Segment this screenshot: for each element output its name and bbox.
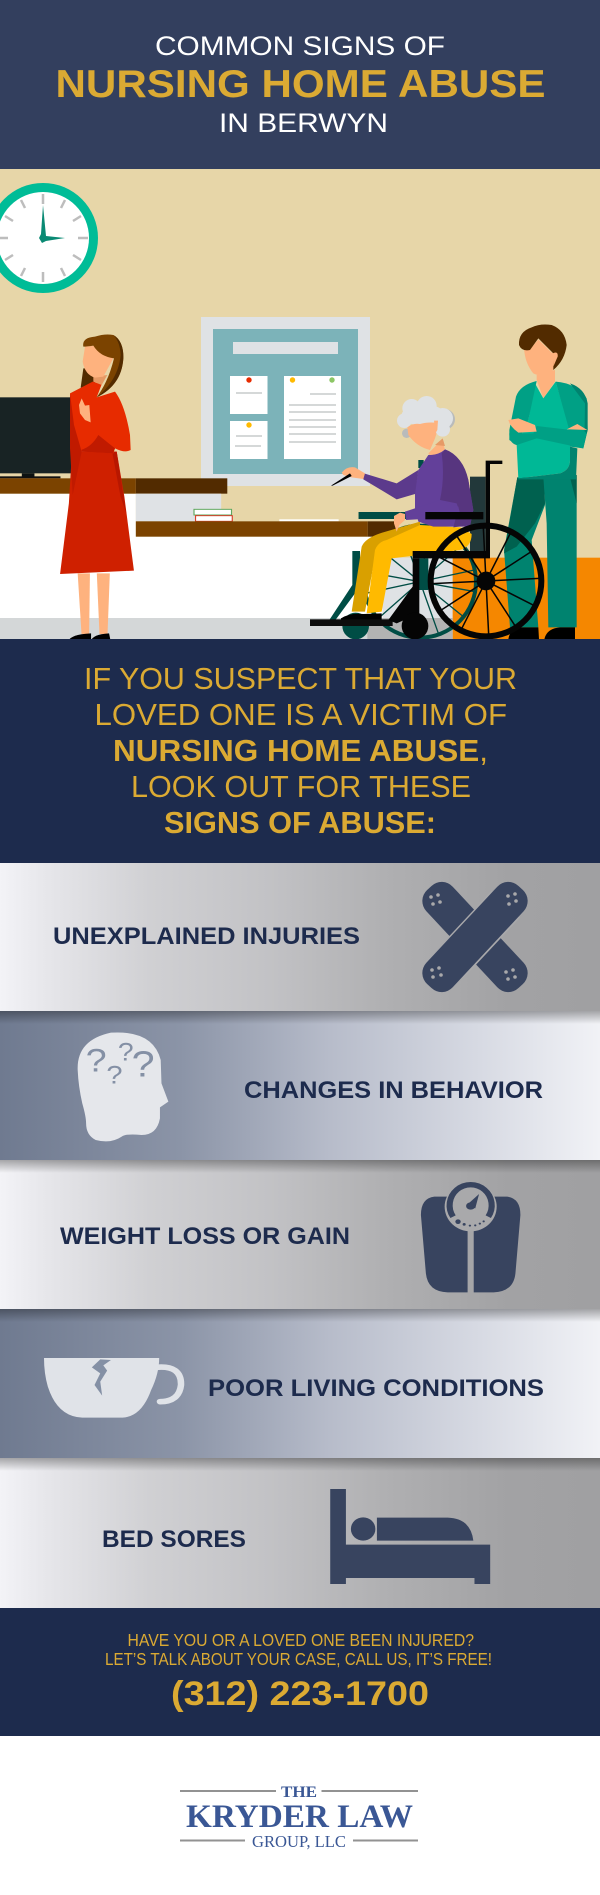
trousers [352,522,420,612]
shoes [341,613,382,620]
old woman in wheelchair [331,396,486,620]
intro line 1: IF YOU SUSPECT THAT YOUR [84,662,517,696]
wheelchair back wheel [329,526,476,639]
logo: The Kryder Law Group: GROUP, LLC [252,1832,346,1851]
wheelchair big wheel [431,526,541,636]
icon: head with question marks: ? [132,1045,155,1085]
head [428,440,445,455]
intro line 4: LOOK OUT FOR THESE [131,770,471,804]
legs and skirt [60,452,134,639]
icon: head with question marks: ? [106,1060,123,1089]
label: CHANGES IN BEHAVIOR [244,1077,543,1104]
icon: bathroom scale [421,1182,520,1292]
call to action panel [0,1608,600,1736]
nurse torso and head [508,325,588,479]
band: weight loss or gain [0,1160,600,1309]
logo: The Kryder Law Group: THE [281,1784,317,1801]
band: changes in behavior [0,1011,600,1160]
illustration: nursing home room [0,169,600,641]
logo: The Kryder Law Group [180,1784,418,1851]
label: UNEXPLAINED INJURIES [53,923,360,950]
band: bed sores [0,1458,600,1608]
icon: person in bed [330,1489,490,1584]
sweater [415,449,473,527]
label: WEIGHT LOSS OR GAIN [60,1223,350,1250]
icon: cracked cup [44,1358,181,1418]
icon: head with question marks: ? [118,1038,134,1066]
wheelchair frame and front wheel [310,461,502,639]
title line 3: IN BERWYN [219,108,388,138]
intro line 2: LOVED ONE IS A VICTIM OF [94,698,507,732]
woman in red dress [60,334,134,639]
nurse legs [504,475,577,639]
head and bodice [70,334,131,495]
icon: head with question marks [78,1032,168,1141]
nurse [504,325,588,639]
icon: wall clock [0,183,98,293]
label: POOR LIVING CONDITIONS [208,1375,544,1402]
logo: The Kryder Law Group: KRYDER LAW [186,1799,413,1835]
title line 2: NURSING HOME ABUSE [56,63,546,106]
band: unexplained injuries [0,863,600,1011]
intro line 3: NURSING HOME ABUSE , [113,734,488,768]
intro line 5: SIGNS OF ABUSE: [164,806,436,840]
bulletin board [201,317,370,486]
icon: crossed bandages [416,876,534,998]
header panel [0,0,600,169]
phone number: (312) 223-1700 [171,1675,429,1713]
title line 1: COMMON SIGNS OF [155,31,445,61]
intro panel [0,639,600,863]
cta line 2: LET’S TALK ABOUT YOUR CASE, CALL US, IT’S FREE! [105,1649,492,1669]
hands and pen [342,467,365,479]
label: BED SORES [102,1526,246,1553]
furniture and floor [0,397,600,641]
band: poor living conditions [0,1309,600,1458]
icon: head with question marks: ? [86,1043,107,1079]
cta line 1: HAVE YOU OR A LOVED ONE BEEN INJURED? [128,1630,474,1650]
